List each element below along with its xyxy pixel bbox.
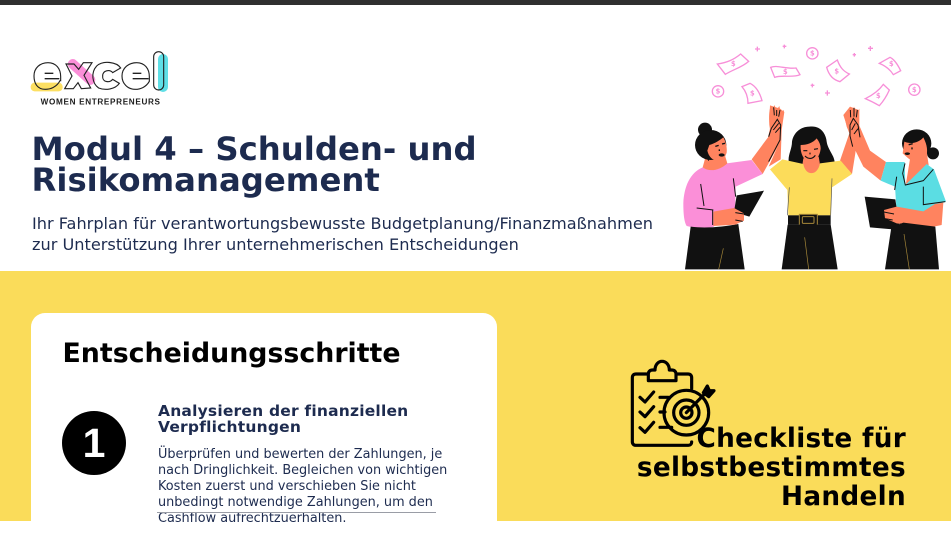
divider line xyxy=(157,512,436,513)
illustration: team high five with money xyxy=(683,44,946,270)
top bar xyxy=(0,0,951,5)
logo tagline: WOMEN ENTREPRENEURS xyxy=(41,97,161,106)
title: Modul 4 – Schulden- und xyxy=(32,130,477,168)
step 1 number xyxy=(62,411,126,475)
subtitle xyxy=(32,214,653,254)
center woman xyxy=(769,105,859,269)
step 1 number: 1 xyxy=(83,420,105,466)
money symbols: $ xyxy=(783,68,788,76)
left woman xyxy=(683,119,781,269)
money symbols: $ xyxy=(834,67,839,75)
logo highlights xyxy=(31,54,168,92)
floating money xyxy=(712,45,920,106)
money symbols: $ xyxy=(889,60,894,68)
yellow background section xyxy=(0,271,951,521)
step 1 heading: Verpflichtungen xyxy=(158,418,301,436)
checklist heading: Checkliste für xyxy=(696,424,906,454)
step 1 body xyxy=(158,446,447,526)
logo xyxy=(30,51,168,106)
money symbols: $ xyxy=(912,86,917,94)
money symbols: $ xyxy=(810,50,815,58)
title: Risikomanagement xyxy=(32,161,380,199)
money symbols: $ xyxy=(750,89,755,97)
money symbols: $ xyxy=(716,88,721,96)
icon: checklist with target xyxy=(630,360,716,447)
subtitle: Ihr Fahrplan für verantwortungsbewusste Budgetplanung/Finanzmaßnahmen xyxy=(32,214,653,233)
step 1 body: nach Dringlichkeit. Begleichen von wichtigen xyxy=(158,463,447,478)
checklist heading: selbstbestimmtes xyxy=(637,453,906,483)
subtitle: zur Unterstützung Ihrer unternehmerischen Entscheidungen xyxy=(32,235,519,254)
step 1 body: unbedingt notwendige Zahlungen, um den xyxy=(158,495,433,510)
checklist heading xyxy=(637,424,906,512)
money symbols: $ xyxy=(876,92,881,100)
title xyxy=(32,130,477,199)
panel: decision steps card xyxy=(31,313,497,553)
checklist heading: Handeln xyxy=(781,482,906,512)
money symbols: $ xyxy=(731,60,736,68)
step 1 heading: Analysieren der finanziellen xyxy=(158,402,408,420)
step 1 heading xyxy=(158,402,408,436)
step 1 body: Cashflow aufrechtzuerhalten. xyxy=(158,511,346,526)
panel heading: Entscheidungsschritte xyxy=(62,338,401,369)
right woman xyxy=(851,124,946,269)
step 1 body: Überprüfen und bewerten der Zahlungen, je xyxy=(158,447,442,462)
hands xyxy=(769,105,861,162)
step 1 body: Kosten zuerst und verschieben Sie nicht xyxy=(158,479,416,494)
logo wordmark outlines xyxy=(34,52,164,90)
money symbols xyxy=(716,50,917,100)
